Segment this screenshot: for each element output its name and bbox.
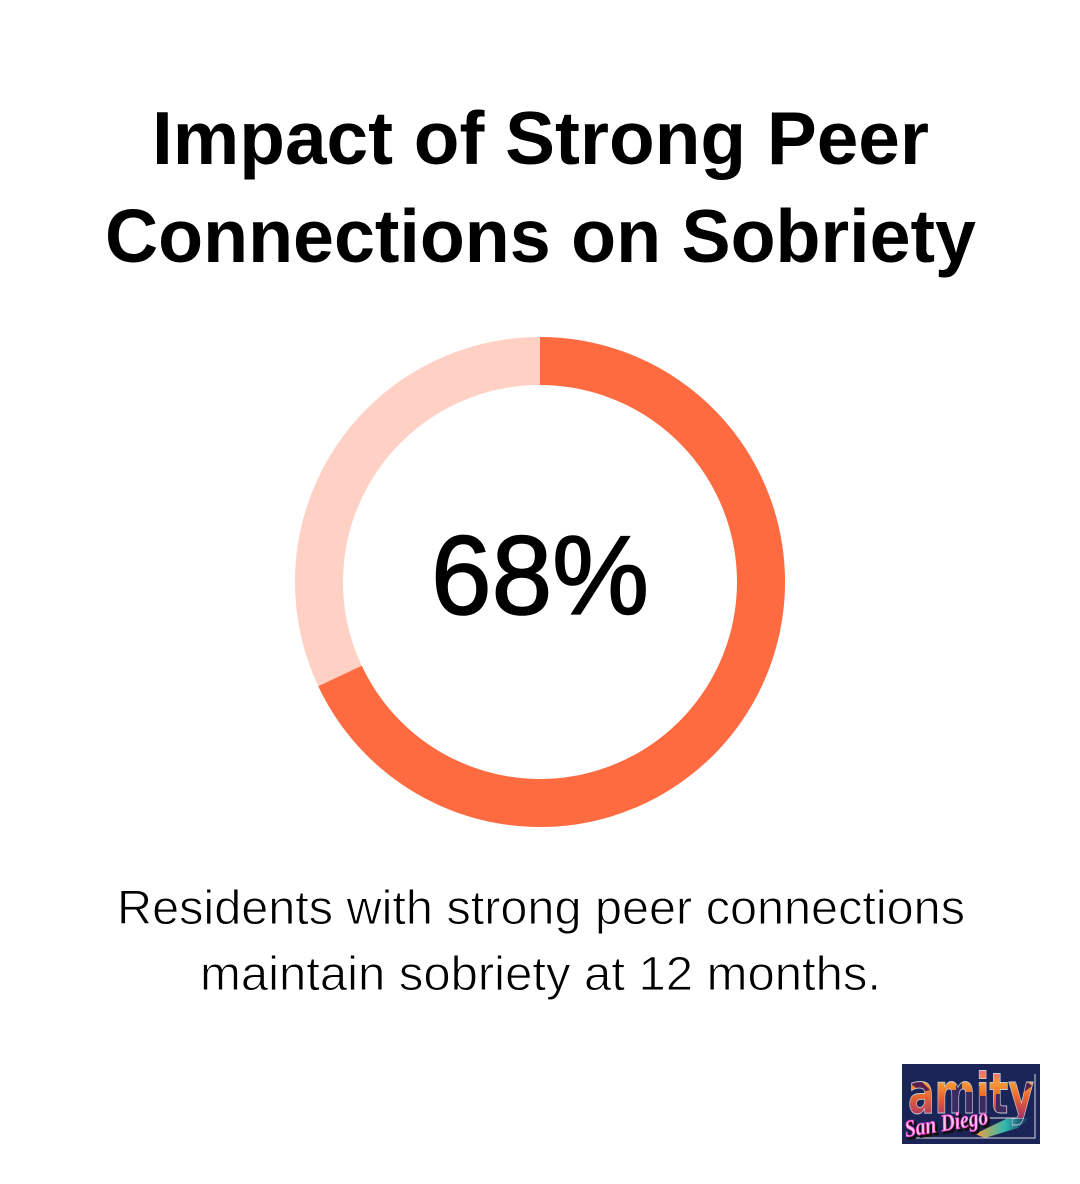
- caption: [117, 882, 965, 1001]
- logo: amity San Diego: San Diego: [905, 1106, 992, 1145]
- donut value arc: [340, 361, 761, 803]
- center value: 68%: [431, 513, 649, 638]
- caption: maintain sobriety at 12 months.: [200, 948, 881, 1001]
- logo: amity San Diego: San Diego: [903, 1104, 990, 1143]
- donut track: [319, 361, 761, 803]
- title: [105, 96, 976, 278]
- logo: amity San Diego: [902, 1062, 1040, 1145]
- infographic canvas: [108, 110, 1040, 1144]
- donut chart: 68 percent: [319, 361, 761, 803]
- title: Impact of Strong Peer: [152, 96, 929, 180]
- title: Connections on Sobriety: [105, 194, 976, 278]
- caption: Residents with strong peer connections: [117, 882, 965, 935]
